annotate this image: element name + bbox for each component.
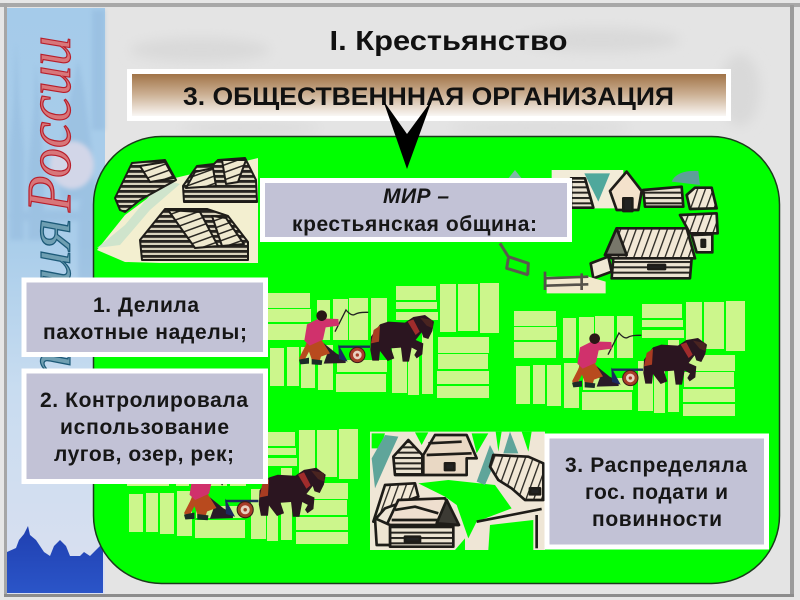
arrow: from header down to МИР	[383, 100, 432, 169]
left decorative strip: История России: России	[16, 36, 84, 213]
icon: blue kremlin skyline	[7, 526, 103, 593]
field plots with plowman, top right	[514, 301, 745, 416]
box: 3 Распределяла: 3. Распределяла	[565, 454, 747, 477]
faint city towers	[8, 10, 105, 280]
title: I. Крестьянство	[330, 25, 568, 56]
village illustration: top right	[500, 170, 718, 293]
box: МИР heading	[262, 180, 570, 240]
box: 2 Контролировала	[24, 371, 266, 482]
box: МИР heading: крестьянская община:	[292, 213, 537, 236]
left decorative strip: История России: История	[16, 218, 84, 481]
left decorative strip: История России	[7, 8, 105, 594]
header bar	[130, 72, 728, 118]
field plots with plowman, top centre	[268, 283, 499, 398]
box: 3 Распределяла	[547, 436, 766, 547]
village illustration: bottom centre	[370, 432, 545, 550]
box: 2 Контролировала: использование	[60, 416, 229, 439]
box: 2 Контролировала: лугов, озер, рек;	[54, 443, 234, 466]
village illustration: top left	[97, 158, 258, 263]
field plots with plowman, bottom left	[127, 429, 358, 544]
box: 3 Распределяла: гос. подати и	[585, 481, 728, 504]
box: МИР heading: МИР –	[383, 185, 449, 208]
box: 1 Делила: пахотные наделы;	[43, 321, 247, 344]
header bar: 3. ОБЩЕСТВЕНННАЯ ОРГАНИЗАЦИЯ	[183, 83, 674, 111]
box: 2 Контролировала: 2. Контролировала	[40, 389, 248, 412]
box: 1 Делила: 1. Делила	[93, 294, 199, 317]
green panel	[94, 136, 780, 584]
box: 1 Делила	[24, 280, 266, 354]
box: 3 Распределяла: повинности	[592, 508, 722, 531]
